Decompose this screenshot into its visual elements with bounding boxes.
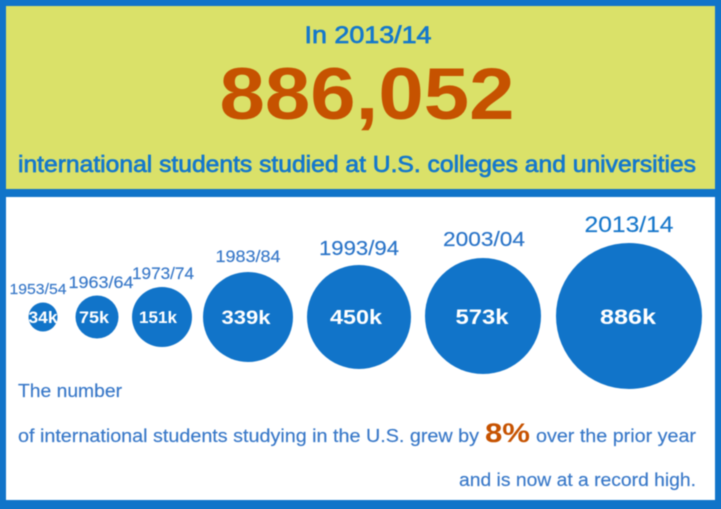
bubble: 2003/04 (425, 229, 541, 374)
caption text: over the prior year (536, 426, 696, 446)
bubble: 1963/64: 75k (79, 308, 110, 327)
panel: headline (6, 6, 715, 189)
bubble: 1983/84 (203, 247, 293, 362)
bubble: 2013/14: 886k (600, 306, 656, 329)
bubble: 1973/74: 151k (139, 308, 178, 327)
panel: growth chart (6, 197, 715, 500)
subheading: international students studied at U.S. colleges and universities (18, 151, 696, 177)
bubble: 1973/74: 1973/74 (132, 265, 194, 283)
caption text: The number (18, 381, 122, 401)
big number: 886,052 (220, 54, 514, 135)
caption text: 8% (485, 418, 530, 448)
bubble: 1993/94: 450k (330, 307, 383, 329)
bubble: 1963/64: 1963/64 (68, 274, 134, 292)
bubble: 1993/94: 1993/94 (319, 238, 399, 260)
bubble: 2013/14: 2013/14 (584, 212, 674, 237)
caption text: and is now at a record high. (459, 470, 696, 490)
bubble: 1953/54: 1953/54 (10, 281, 66, 298)
heading: year: In 2013/14 (304, 22, 432, 49)
bubble: 1953/54 (10, 281, 66, 332)
bubble: 2003/04: 2003/04 (443, 229, 525, 251)
bubble: 1983/84: 339k (222, 308, 271, 329)
bubble: 1963/64 (68, 274, 134, 338)
bubble: 1993/94 (307, 238, 411, 369)
caption text (18, 381, 696, 490)
bubble: 1983/84: 1983/84 (216, 247, 280, 266)
bubble: 2013/14 (556, 212, 702, 389)
caption text: of international students studying in the U.S. grew by (18, 426, 479, 446)
bubble: 2003/04: 573k (456, 306, 509, 329)
bubble: 1973/74 (132, 265, 194, 347)
bubble: 1953/54: 34k (28, 308, 58, 327)
